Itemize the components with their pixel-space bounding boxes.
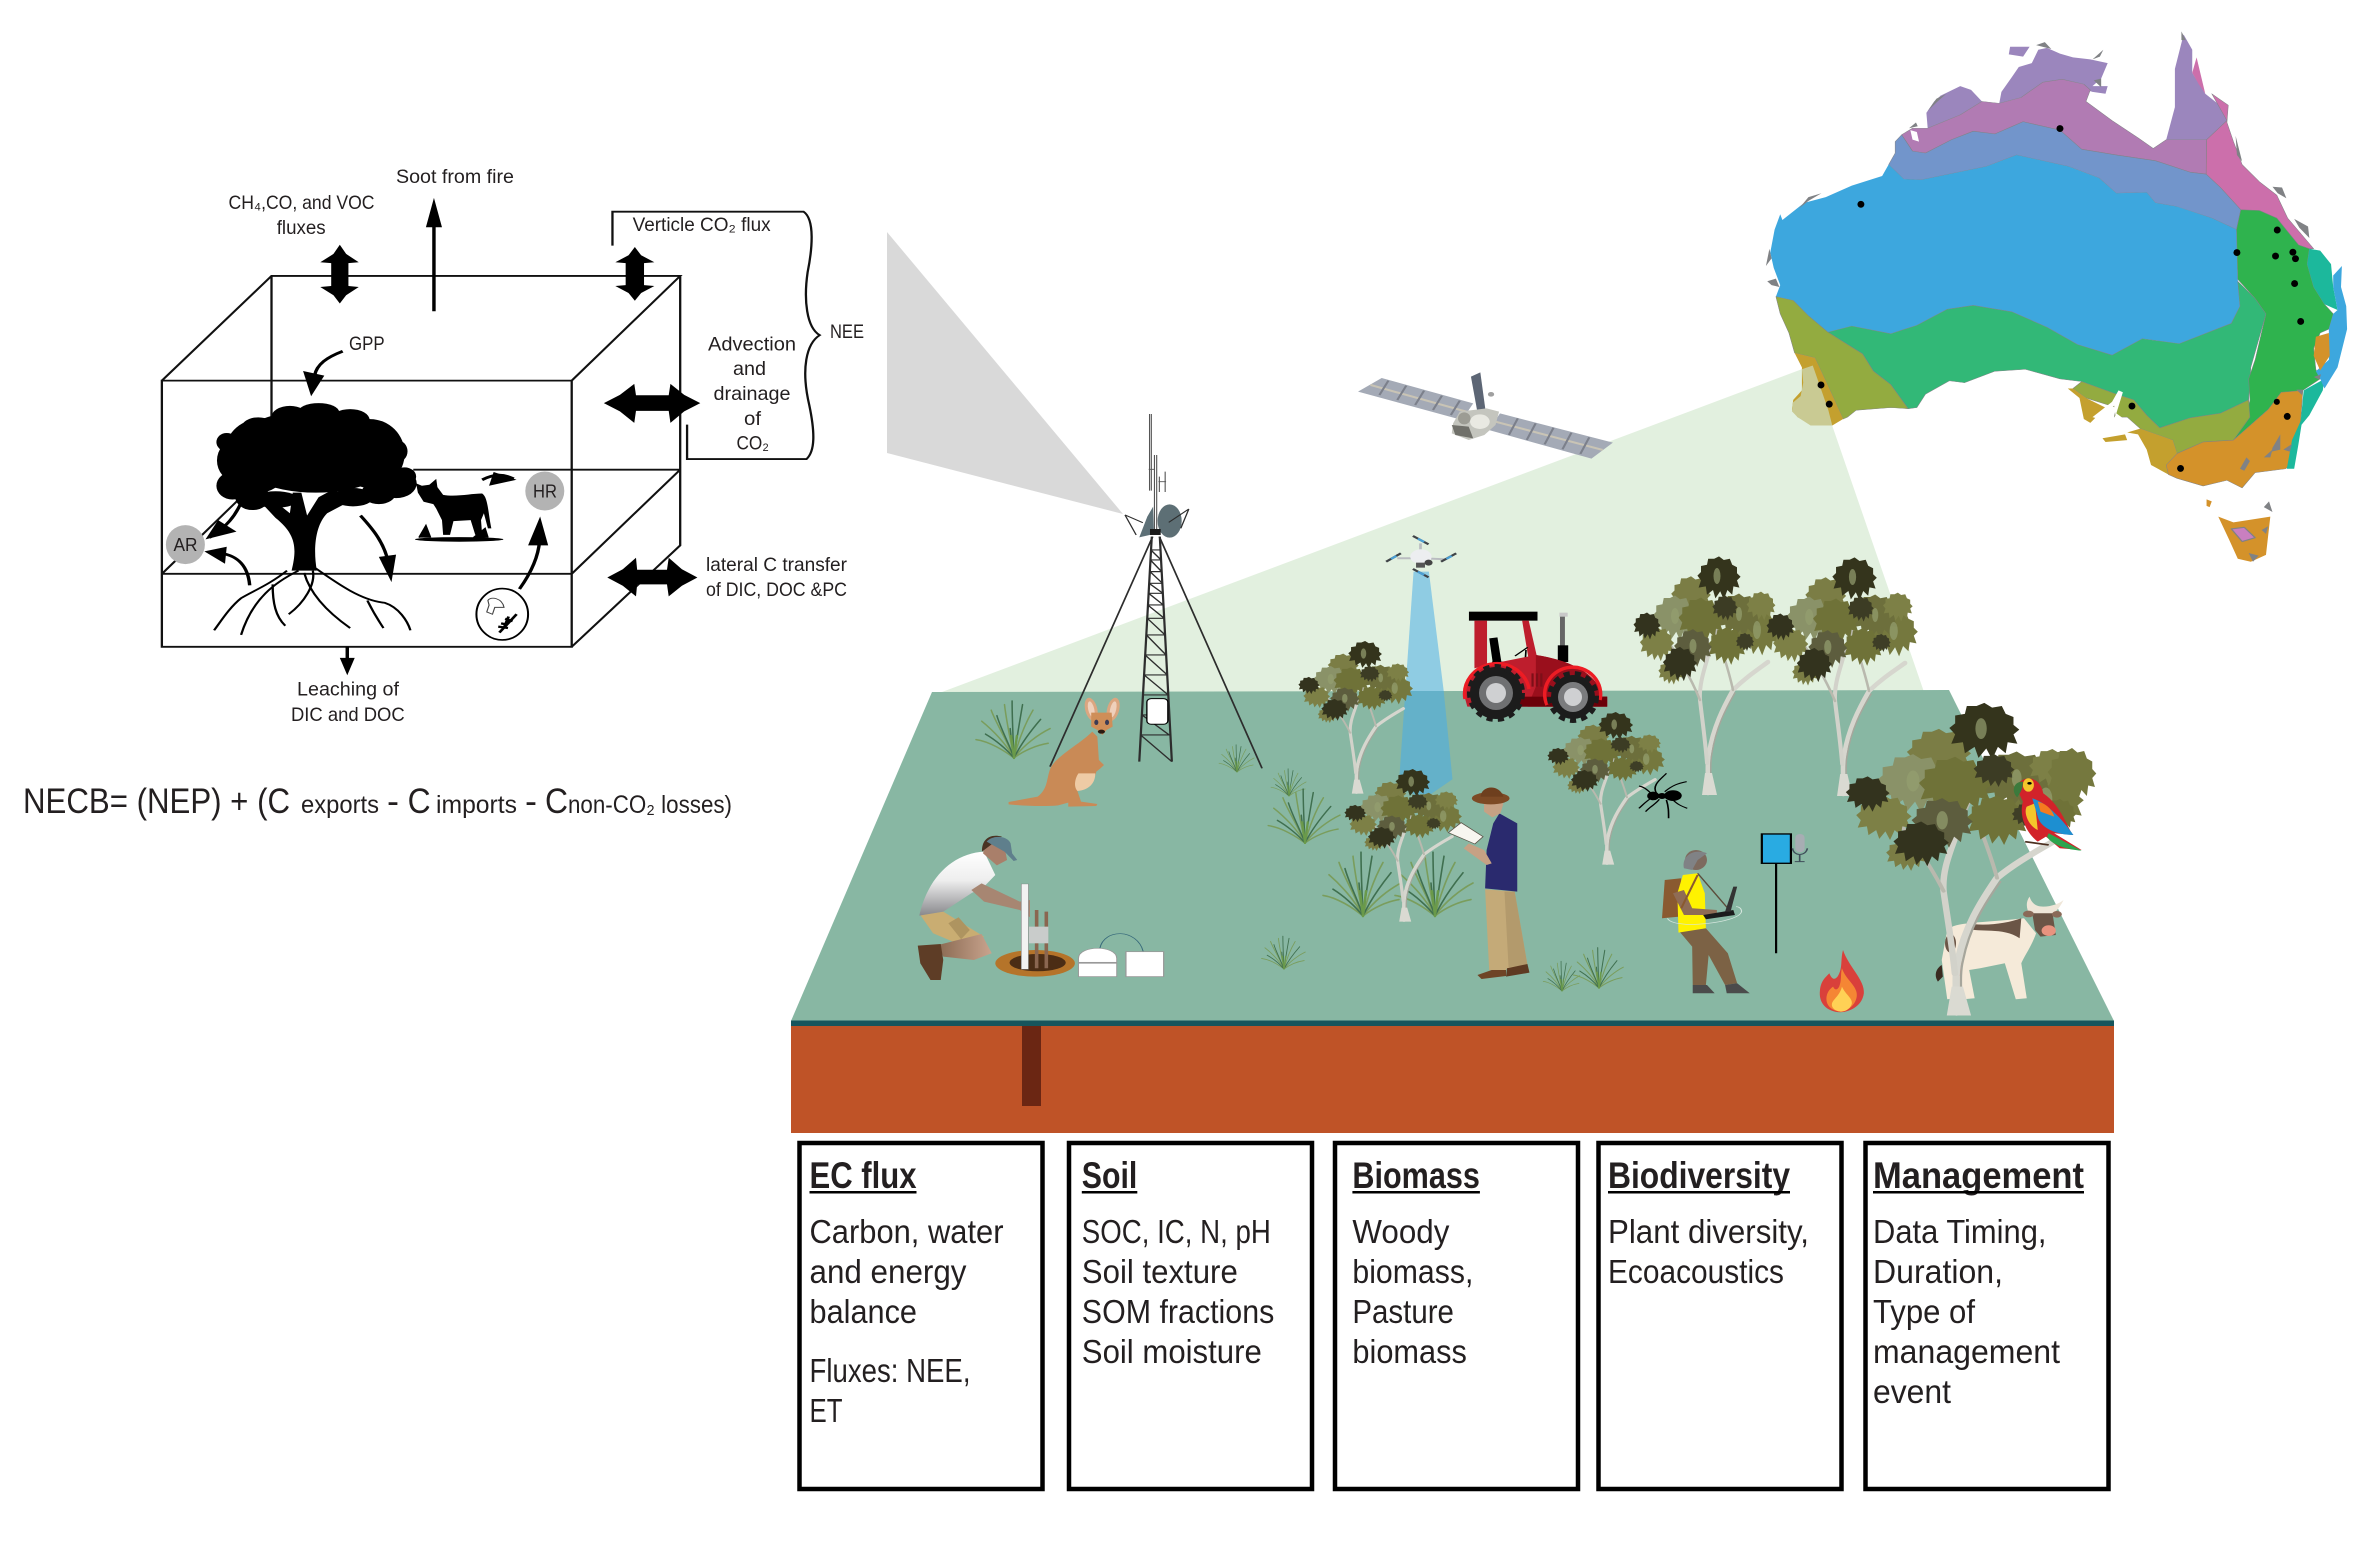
diagram labels: and xyxy=(733,358,766,380)
diagram: grazing cow xyxy=(415,479,503,542)
drone survey beam xyxy=(1399,572,1452,799)
diagram labels: of DIC, DOC &PC xyxy=(706,579,847,601)
diagram labels: Verticle CO₂ flux xyxy=(633,214,771,236)
panel: Management xyxy=(1866,1143,2108,1489)
tower field of view cone xyxy=(887,232,1123,514)
diagram labels: Soot from fire xyxy=(396,166,514,188)
icon: tractor xyxy=(1465,612,1607,707)
equation: NECB xyxy=(23,782,732,821)
remote sensing beam xyxy=(942,365,1924,692)
eucalyptus trees xyxy=(1298,556,1918,922)
equation: NECB: exports xyxy=(301,791,379,819)
respiration markers: HR xyxy=(533,480,557,502)
text: Management details: management xyxy=(1873,1333,2060,1370)
heading: Soil: Soil xyxy=(1082,1155,1137,1196)
text: Management details: Data Timing, xyxy=(1873,1213,2046,1250)
person: surveyor with tablet xyxy=(1448,788,1529,979)
map: Australia bioregions xyxy=(1766,31,2347,562)
icon: drone xyxy=(1386,536,1456,577)
respiration markers: AR xyxy=(174,534,198,555)
diagram labels: Leaching of xyxy=(297,679,400,701)
text: Soil details: SOM fractions xyxy=(1082,1293,1274,1330)
heading: Biomass: Biomass xyxy=(1352,1155,1480,1196)
equation: NECB: non-CO₂ losses) xyxy=(568,791,732,819)
heading: Management: Management xyxy=(1873,1155,2084,1196)
text: Management details: event xyxy=(1873,1373,1951,1410)
text: Biomass details xyxy=(1352,1213,1473,1370)
icon: cow xyxy=(1936,897,2064,999)
diagram labels: CH₄,CO, and VOC xyxy=(228,192,374,214)
heading: Biodiversity: Biodiversity xyxy=(1608,1155,1790,1196)
text: Soil details xyxy=(1082,1213,1274,1370)
person: field worker with laptop xyxy=(1662,850,1750,993)
icon: parrot xyxy=(2014,778,2082,851)
respiration markers xyxy=(166,472,564,564)
text: EC flux details: Carbon, water xyxy=(810,1213,1004,1250)
icon: satellite xyxy=(1358,372,1613,459)
text: EC flux details: ET xyxy=(810,1392,842,1429)
tractor wheels xyxy=(1465,664,1601,720)
text: EC flux details xyxy=(810,1213,1004,1429)
diagram labels: CO₂ xyxy=(736,433,769,455)
panel: Biomass xyxy=(1335,1143,1578,1489)
icon: kangaroo xyxy=(1009,697,1122,807)
text: Soil details: SOC, IC, N, pH xyxy=(1082,1213,1271,1250)
text: Management details xyxy=(1873,1213,2060,1410)
equation: NECB: - xyxy=(387,782,399,821)
soil profile xyxy=(791,1020,2114,1133)
diagram labels: fluxes xyxy=(277,217,326,239)
text: Biomass details: Pasture xyxy=(1352,1293,1454,1330)
text: Soil details: Soil moisture xyxy=(1082,1333,1262,1370)
diagram labels: NEE xyxy=(830,321,864,343)
diagram labels: GPP xyxy=(349,333,385,355)
diagram labels: drainage xyxy=(714,383,790,405)
diagram labels: DIC and DOC xyxy=(291,704,405,726)
diagram labels: of xyxy=(744,408,762,430)
diagram: box frame xyxy=(162,212,820,647)
diagram: soil organisms xyxy=(476,589,528,640)
panel: EC flux xyxy=(800,1143,1042,1489)
icon: ant xyxy=(1639,773,1687,818)
icon: ecoacoustic recorder xyxy=(1762,834,1807,953)
text: Soil details: Soil texture xyxy=(1082,1253,1238,1290)
text: Biodiversity details xyxy=(1608,1213,1809,1290)
person: soil technician with probe xyxy=(918,836,1075,980)
panel: ecosystem carbon box diagram xyxy=(162,166,864,726)
icon: fire xyxy=(1820,950,1864,1012)
text: EC flux details: Fluxes: NEE, xyxy=(810,1352,970,1389)
text: Management details: Type of xyxy=(1873,1293,1976,1330)
diagram: tree silhouette xyxy=(214,403,417,635)
text: Biodiversity details: Ecoacoustics xyxy=(1608,1253,1784,1290)
text: EC flux details: and energy xyxy=(810,1253,967,1290)
text: Biomass details: biomass xyxy=(1352,1333,1467,1370)
large eucalyptus tree xyxy=(1846,703,2096,1015)
text: Biodiversity details: Plant diversity, xyxy=(1608,1213,1809,1250)
text: Management details: Duration, xyxy=(1873,1253,2003,1290)
panel: Soil xyxy=(1069,1143,1312,1489)
bracket: NEE xyxy=(612,212,820,459)
equation: NECB: NECB= (NEP) + (C xyxy=(23,782,290,821)
diagram labels: lateral C transfer xyxy=(706,554,847,576)
text: EC flux details: balance xyxy=(810,1293,917,1330)
equation: NECB: C xyxy=(408,782,431,821)
equation: NECB: C xyxy=(545,782,568,821)
ground surface xyxy=(791,690,2114,1021)
icon: flux tower xyxy=(1050,414,1262,768)
heading: EC flux: EC flux xyxy=(810,1155,917,1196)
diagram: flux arrows xyxy=(204,198,700,675)
equation: NECB: - xyxy=(525,782,537,821)
text: Biomass details: Woody xyxy=(1352,1213,1450,1250)
equation: NECB: imports xyxy=(436,791,517,819)
diagram labels xyxy=(228,166,864,726)
icon: sensor boxes xyxy=(1078,934,1164,977)
grass tufts xyxy=(976,701,1623,991)
text: Biomass details: biomass, xyxy=(1352,1253,1473,1290)
panel: Biodiversity xyxy=(1598,1143,1842,1489)
diagram labels: Advection xyxy=(708,333,796,355)
